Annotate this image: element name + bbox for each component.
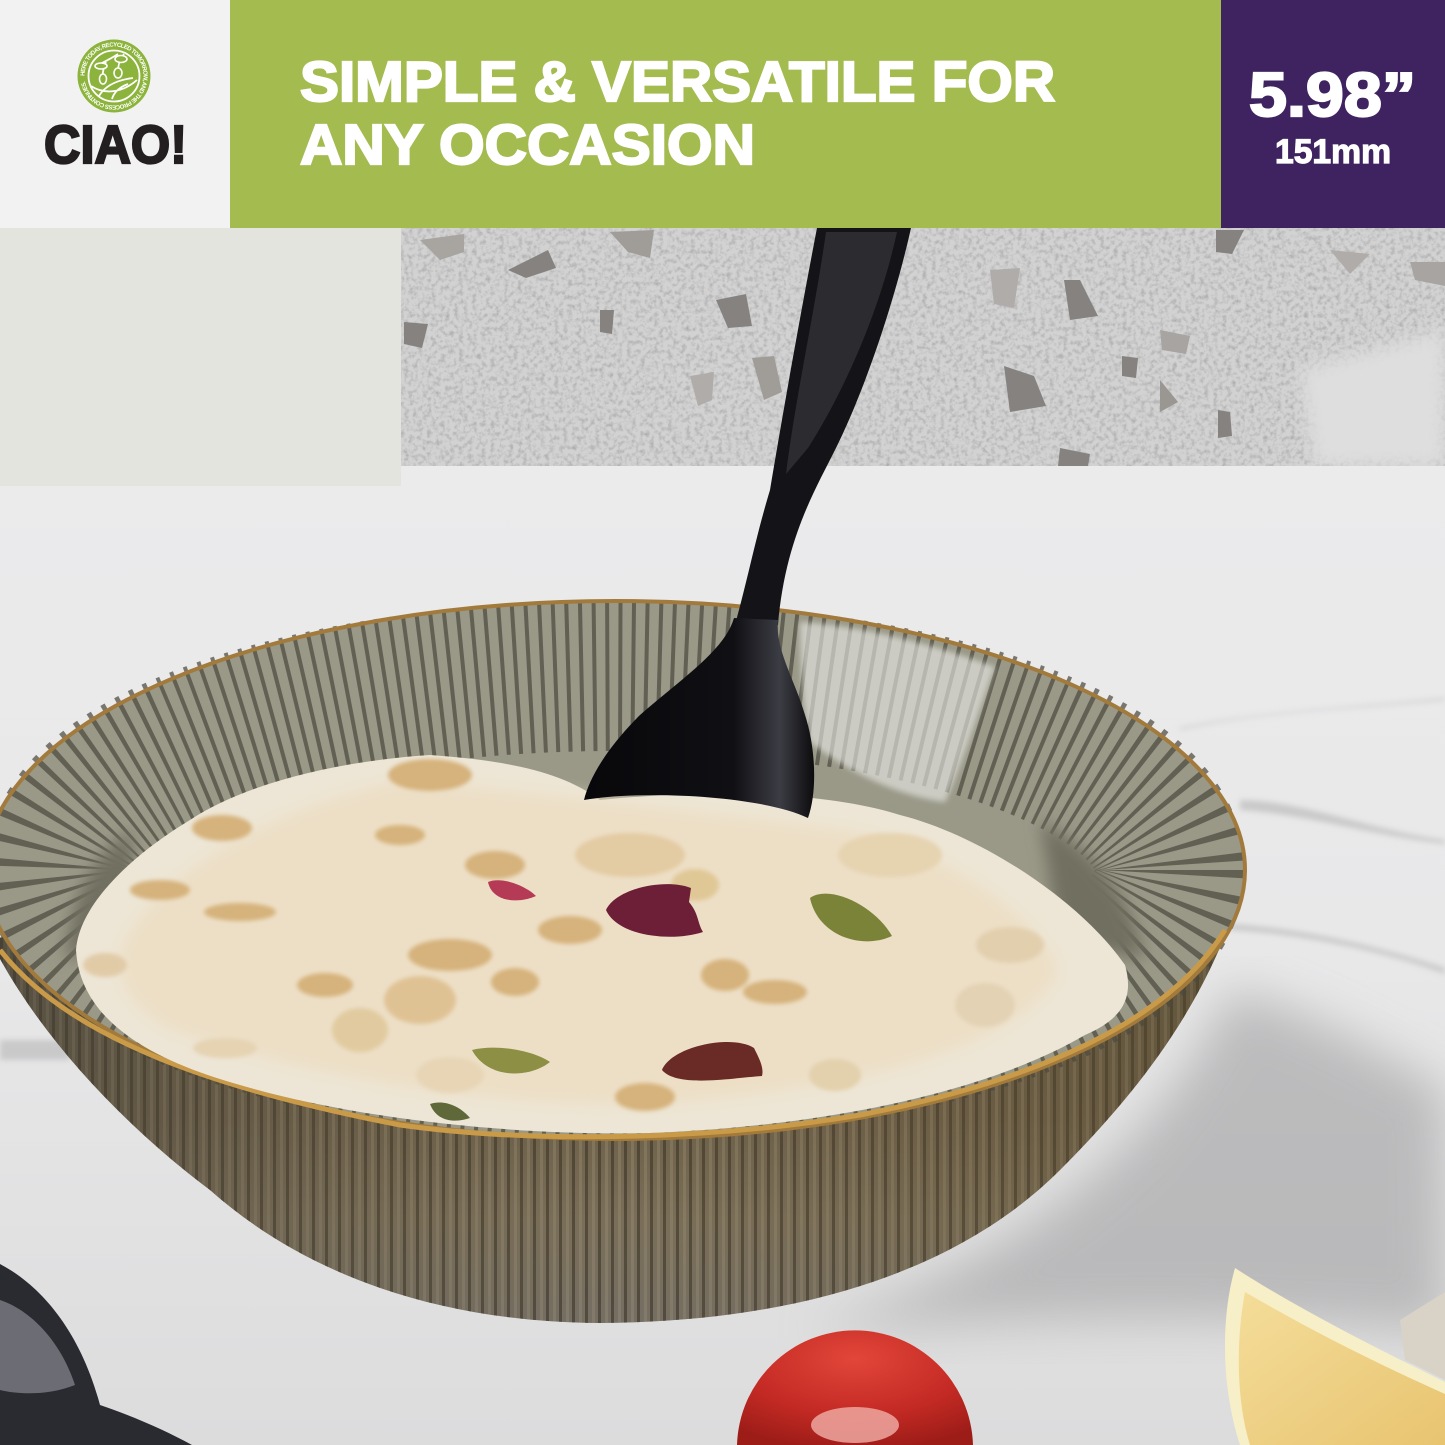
stone surface behind lemon [1400, 1292, 1445, 1380]
pumpkin seeds [430, 894, 892, 1121]
size inches: 5.98” [1249, 61, 1416, 130]
background: white block [0, 228, 401, 486]
headline: SIMPLE & VERSATILE FOR [300, 50, 1055, 114]
spoon corner highlight [0, 1300, 75, 1393]
spoon handle [735, 228, 911, 625]
logo badge: HERE TODAY, RECYCLED TOMORROW, AND THE PROCESS CONTINUES. [80, 42, 148, 110]
spoon in the corner [0, 1264, 192, 1445]
black spoon in bowl [584, 228, 911, 818]
radial rib lines of the inner wall [60, 676, 1170, 1064]
logo panel [0, 0, 230, 228]
spoon handle textured panel [786, 232, 897, 474]
gold rim [0, 601, 1245, 1139]
bowl shadow on counter [805, 990, 1445, 1330]
bowl [0, 601, 1245, 1323]
bowl outer body with ribs [0, 800, 1244, 1323]
oat flakes [83, 759, 1044, 1111]
bright rim front edge [0, 930, 1225, 1137]
tomato [737, 1330, 973, 1445]
oatmeal [76, 755, 1128, 1133]
marble counter [0, 466, 1445, 1445]
headline [300, 50, 1055, 177]
glass reflection [800, 622, 995, 802]
background: terrazzo wall [401, 228, 1445, 466]
size panel [1221, 0, 1445, 228]
soft shading where the ribs meet the oatmeal [65, 820, 1145, 960]
lemon wedge [1225, 1268, 1445, 1445]
logo wordmark: CIAO! [44, 115, 187, 175]
dried cranberries [488, 880, 763, 1081]
headline: ANY OCCASION [300, 113, 755, 177]
spoon bowl [584, 618, 814, 818]
size millimetres: 151mm [1275, 133, 1391, 171]
headline banner [230, 0, 1221, 228]
bowl inner wall [0, 601, 1245, 1139]
